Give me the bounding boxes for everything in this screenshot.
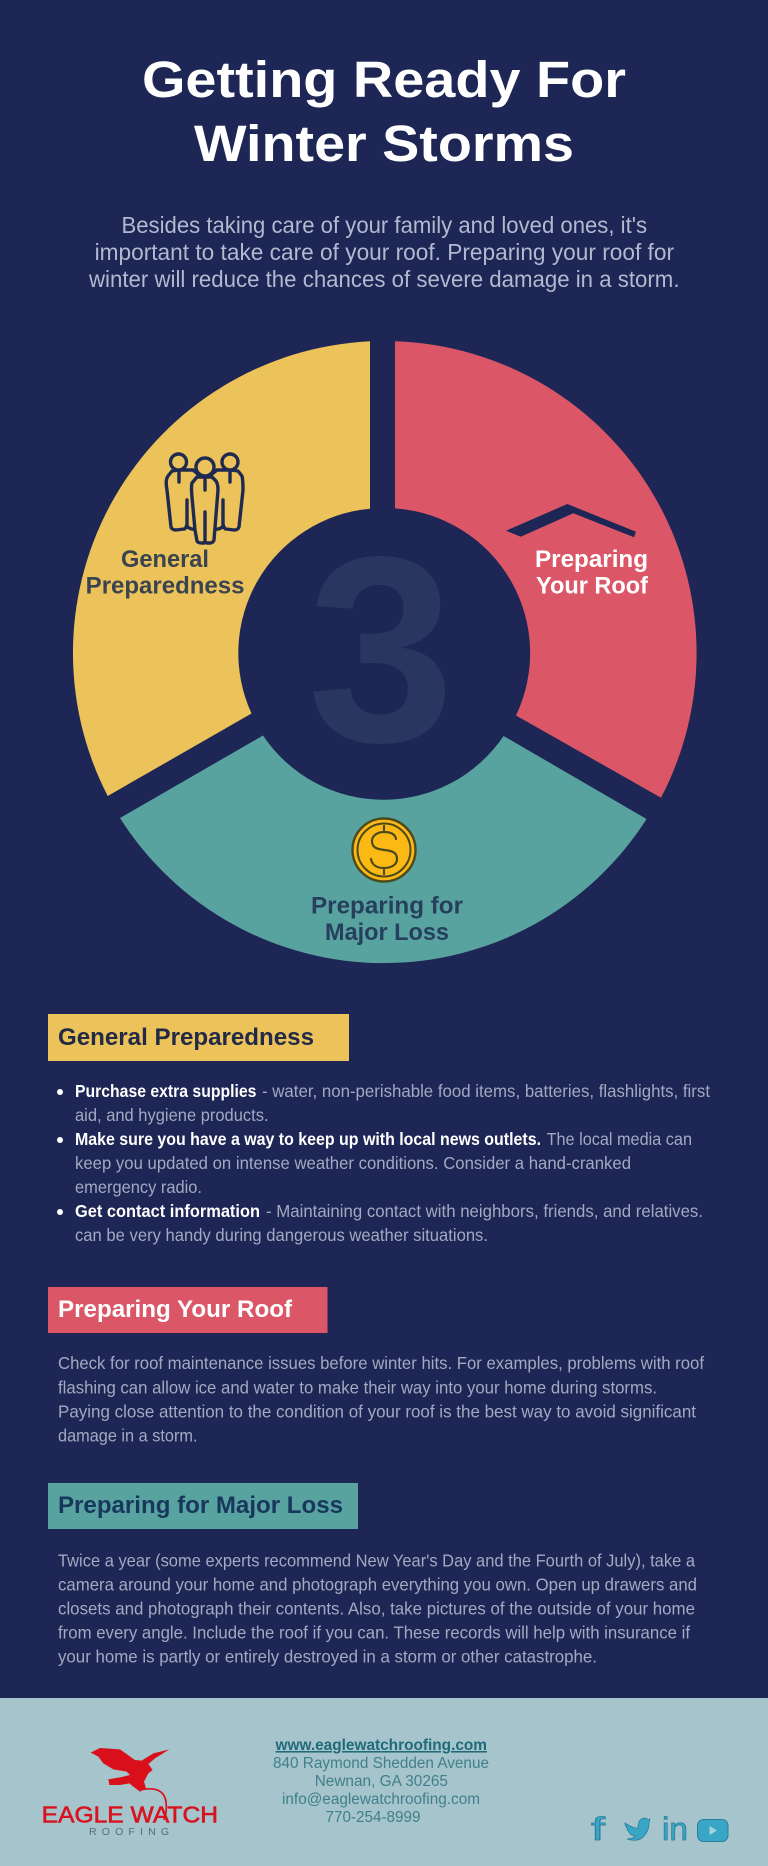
icon: youtube bbox=[698, 1820, 728, 1842]
contact details: 770-254-8999 bbox=[326, 1809, 420, 1826]
bullet list: Get contact information bbox=[75, 1201, 260, 1221]
contact details: 840 Raymond Shedden Avenue bbox=[273, 1755, 489, 1772]
panel: general preparedness bbox=[48, 1014, 710, 1245]
logo: eagle watch roofing bbox=[42, 1748, 218, 1838]
heading: general preparedness: General Preparedness bbox=[58, 1024, 314, 1051]
title: Getting Ready For bbox=[142, 51, 626, 108]
bullet list: The local media can bbox=[547, 1129, 692, 1149]
logo subtitle: ROOFING bbox=[89, 1826, 169, 1838]
contact details: www.eaglewatchroofing.com bbox=[275, 1737, 487, 1754]
center number 3: 3 bbox=[308, 502, 454, 798]
label: preparing for major loss bbox=[311, 893, 463, 946]
icon: twitter bbox=[625, 1818, 650, 1840]
roof text: Check for roof maintenance issues before winter hits. For examples, problems with roof bbox=[58, 1353, 704, 1373]
contact details: info@eaglewatchroofing.com bbox=[282, 1791, 480, 1808]
label: preparing for major loss: Major Loss bbox=[325, 919, 449, 946]
roof text: flashing can allow ice and water to make their way into your home during storms. bbox=[58, 1378, 657, 1398]
bullet list: - Maintaining contact with neighbors, friends, and relatives. bbox=[266, 1201, 703, 1221]
heading: preparing for major loss: Preparing for Major Loss bbox=[58, 1492, 343, 1519]
panel: preparing your roof bbox=[48, 1287, 704, 1446]
icon: eagle bbox=[91, 1748, 169, 1820]
heading: preparing for major loss bbox=[48, 1483, 358, 1529]
label: preparing your roof: Preparing bbox=[535, 546, 648, 573]
title bbox=[142, 51, 626, 172]
roof text: Paying close attention to the condition of your roof is the best way to avoid significant bbox=[58, 1402, 696, 1422]
title: Winter Storms bbox=[194, 115, 574, 172]
contact details bbox=[273, 1737, 489, 1826]
icon: three people bbox=[166, 454, 243, 543]
major loss text: Twice a year (some experts recommend New Year's Day and the Fourth of July), take a bbox=[58, 1551, 695, 1571]
contact details: Newnan, GA 30265 bbox=[315, 1773, 448, 1790]
social icons bbox=[591, 1811, 728, 1847]
major loss text: from every angle. Include the roof if you can. These records will help with insurance if bbox=[58, 1623, 690, 1643]
label: general preparedness: General bbox=[121, 546, 209, 573]
icon: roof bbox=[506, 504, 636, 537]
major loss text bbox=[58, 1551, 697, 1667]
panel: preparing for major loss bbox=[48, 1483, 697, 1667]
bullet list: emergency radio. bbox=[75, 1177, 202, 1197]
bullet list: keep you updated on intense weather conditions. Consider a hand-cranked bbox=[75, 1153, 631, 1173]
intro text bbox=[88, 212, 679, 292]
major loss text: closets and photograph their contents. Also, take pictures of the outside of your home bbox=[58, 1599, 695, 1619]
roof text: damage in a storm. bbox=[58, 1426, 198, 1446]
logo wordmark: EAGLE WATCH bbox=[42, 1802, 218, 1828]
segment: preparing for major loss bbox=[120, 736, 647, 963]
intro text: winter will reduce the chances of severe damage in a storm. bbox=[88, 266, 679, 292]
intro text: Besides taking care of your family and loved ones, it's bbox=[122, 212, 647, 238]
roof text bbox=[58, 1353, 704, 1446]
bullet list: aid, and hygiene products. bbox=[75, 1105, 269, 1125]
bullet list bbox=[57, 1081, 710, 1245]
icon: linkedin: in bbox=[662, 1811, 688, 1847]
heading: general preparedness bbox=[48, 1014, 349, 1061]
label: general preparedness: Preparedness bbox=[86, 573, 244, 600]
bullet list: Make sure you have a way to keep up with local news outlets. bbox=[75, 1129, 541, 1149]
donut chart bbox=[73, 341, 697, 963]
segment: preparing your roof bbox=[395, 341, 697, 798]
label: preparing for major loss: Preparing for bbox=[311, 893, 463, 920]
label: preparing your roof: Your Roof bbox=[536, 573, 649, 600]
bullet list: - water, non-perishable food items, batteries, flashlights, first bbox=[262, 1081, 710, 1101]
bullet list: Purchase extra supplies bbox=[75, 1081, 257, 1101]
segment: general preparedness bbox=[73, 341, 370, 796]
intro text: important to take care of your roof. Preparing your roof for bbox=[95, 239, 674, 265]
major loss text: your home is partly or entirely destroyed in a storm or other catastrophe. bbox=[58, 1647, 597, 1667]
icon: dollar coin bbox=[352, 818, 416, 882]
icon: facebook: f bbox=[591, 1811, 605, 1847]
footer bbox=[0, 1698, 768, 1866]
heading: preparing your roof: Preparing Your Roof bbox=[58, 1296, 293, 1323]
bullet list: can be very handy during dangerous weather situations. bbox=[75, 1225, 488, 1245]
label: general preparedness bbox=[86, 546, 244, 600]
heading: preparing your roof bbox=[48, 1287, 328, 1333]
major loss text: camera around your home and photograph everything you own. Open up drawers and bbox=[58, 1575, 697, 1595]
label: preparing your roof bbox=[535, 546, 649, 600]
